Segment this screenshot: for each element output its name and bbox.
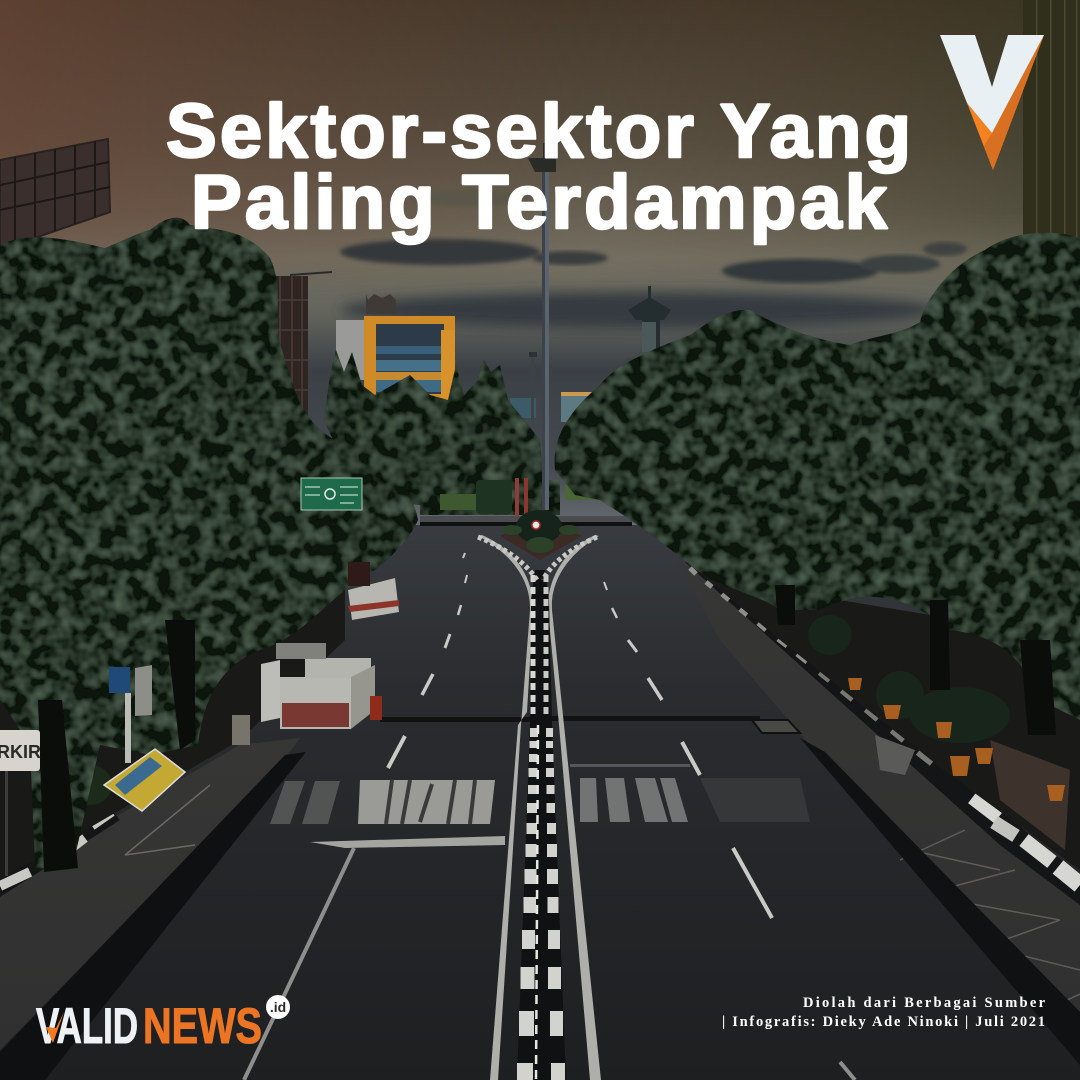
- clouds: [340, 190, 967, 328]
- left tree trunk: [38, 620, 195, 872]
- street light pole: [528, 143, 556, 510]
- ValidNews logo: NEWS: [143, 998, 262, 1054]
- left roadside ground: [0, 590, 345, 880]
- right sidewalk stalls and plants: [690, 565, 1080, 870]
- ValidNews logo: VALID: [36, 998, 138, 1054]
- expansion joint and manhole: [380, 716, 800, 733]
- parking sign: [0, 730, 41, 876]
- lane markings: [244, 553, 855, 1080]
- median garden: [500, 510, 582, 560]
- distant tower and buildings: [510, 286, 671, 422]
- left trees: [0, 218, 418, 870]
- white banner boards: [232, 643, 382, 745]
- parked truck: [348, 562, 399, 620]
- right tree trunks: [775, 585, 1056, 735]
- zebra crossing right: [570, 764, 810, 822]
- source credits: Diolah dari Berbagai Sumber: [803, 995, 1046, 1011]
- ValidNews logo: [36, 995, 290, 1054]
- road edge line left: [478, 535, 533, 1080]
- green road sign: [301, 478, 362, 510]
- sky background: [0, 0, 1023, 525]
- left billboard frame: [0, 139, 110, 250]
- right dark band: [800, 738, 1080, 1065]
- roadside shrubs left: [68, 765, 112, 805]
- left sidewalk: [0, 738, 300, 1050]
- pedestrian sign post: [109, 665, 152, 763]
- title: [166, 89, 911, 245]
- yellow blue fallen board: [104, 749, 185, 811]
- road surface base: [0, 516, 1080, 1080]
- right curb: [685, 562, 1080, 905]
- .id badge: [266, 995, 290, 1019]
- median island curb: [478, 537, 597, 1080]
- stop line left: [310, 836, 505, 848]
- brand V mark: [940, 35, 1044, 170]
- road edge line right: [548, 535, 601, 1080]
- left curb: [0, 808, 120, 897]
- title: Paling Terdampak: [191, 160, 888, 245]
- right trees: [555, 233, 1080, 720]
- orange office building: [336, 294, 455, 430]
- source credits: | Infografis: Dieky Ade Ninoki | Juli 2021: [722, 1014, 1045, 1030]
- median right row blocks: [546, 728, 565, 1080]
- zebra crossing left: [270, 780, 495, 824]
- .id badge: .id: [270, 999, 286, 1015]
- source credits: [722, 995, 1046, 1030]
- left dark band: [0, 752, 306, 1080]
- central trees: [324, 350, 560, 515]
- lattice tower: [274, 272, 332, 426]
- title: Sektor-sektor Yang: [166, 89, 911, 174]
- right sidewalk: [678, 562, 1080, 1030]
- right tall building: [1023, 0, 1080, 240]
- median left row blocks: [517, 728, 538, 1080]
- lawn and hedge: [440, 478, 595, 520]
